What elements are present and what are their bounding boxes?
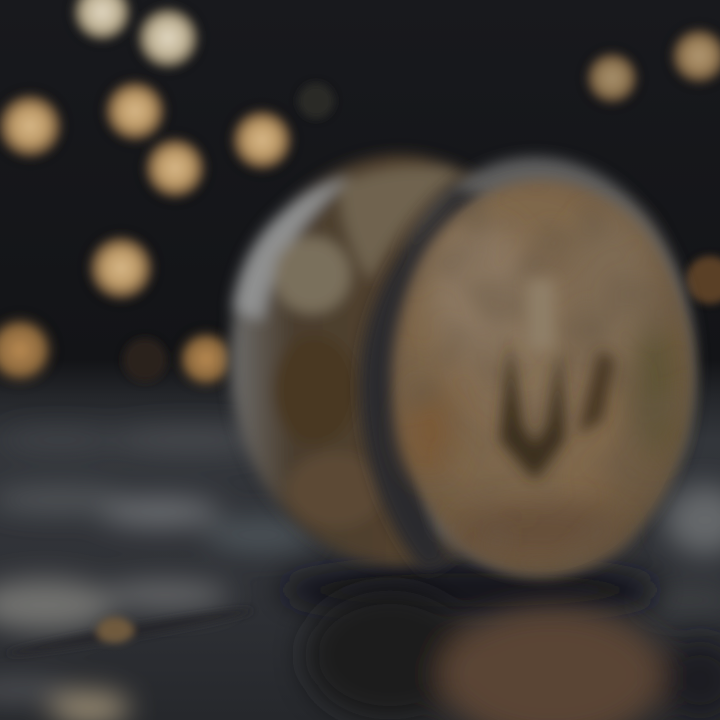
coin body (230, 155, 570, 565)
coin face (392, 180, 692, 576)
coin reflection (305, 590, 720, 720)
coin (230, 155, 695, 616)
surface streaks (0, 428, 720, 720)
dark crack and gold glint on surface (6, 604, 254, 660)
bokeh lights (0, 0, 720, 391)
coin emblem (500, 280, 614, 480)
coin face mottling (396, 184, 688, 572)
coin rim (360, 157, 695, 573)
coin shadow (280, 564, 660, 616)
